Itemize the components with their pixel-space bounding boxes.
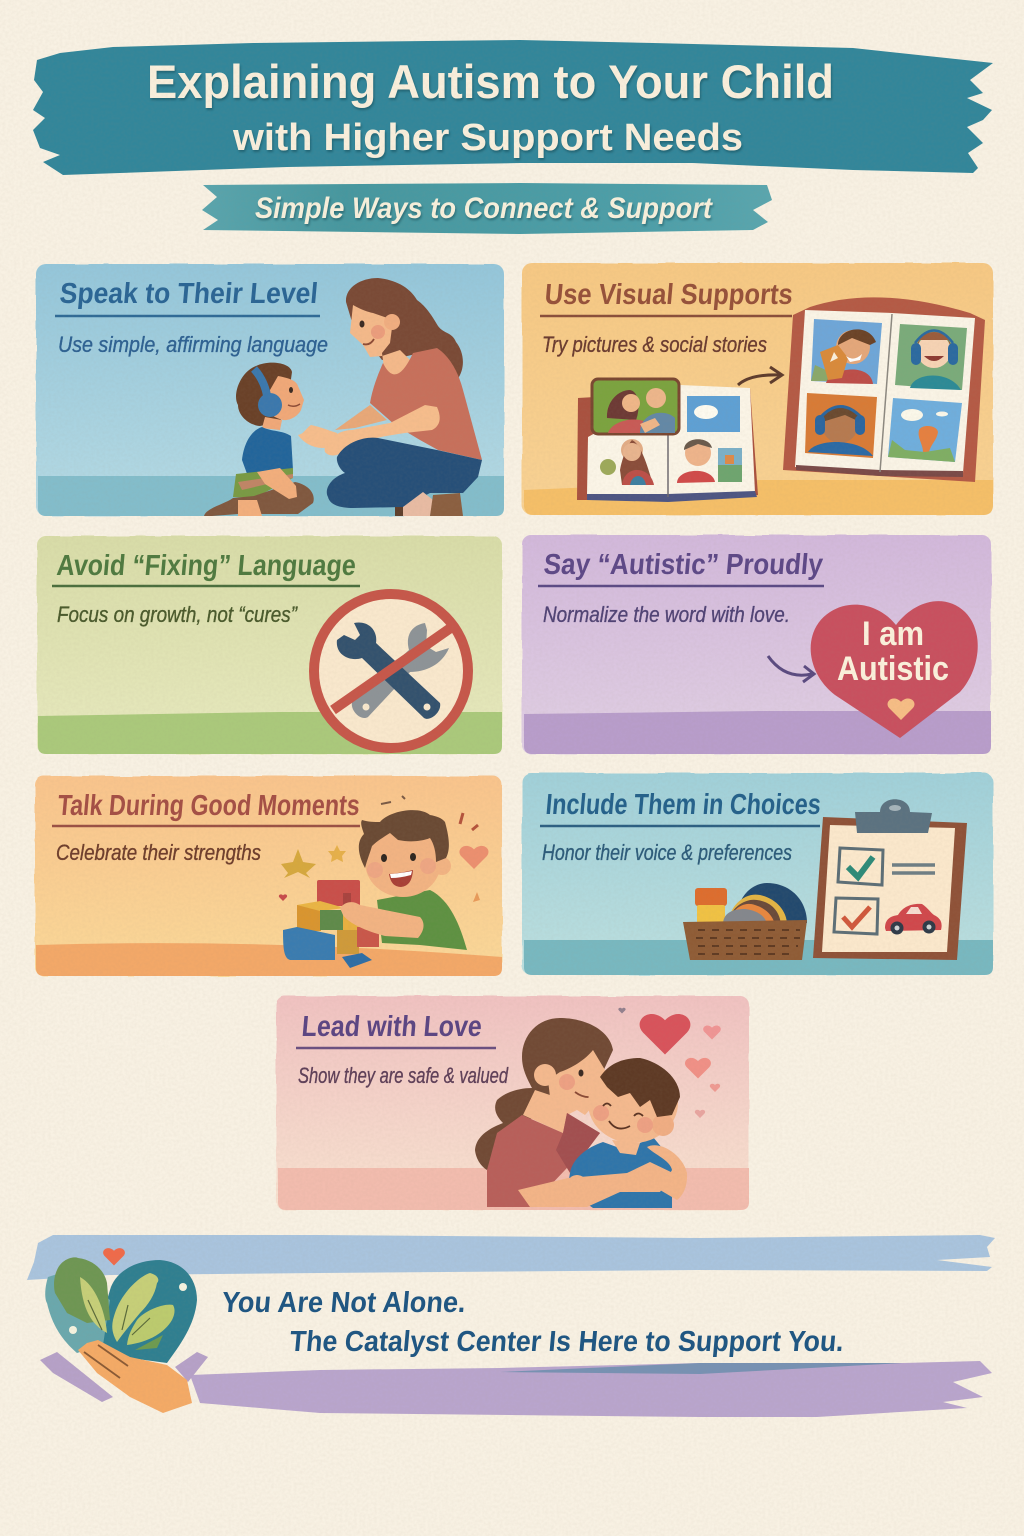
subheading: Honor their voice & preferences — [542, 840, 792, 865]
icon: I am Autistic heart: Autistic — [837, 650, 949, 688]
panel: speak to their level — [36, 264, 504, 516]
illustration: child with blocks — [279, 796, 489, 968]
heading: Speak to Their Level — [58, 278, 319, 310]
footer banner: The Catalyst Center Is Here to Support You. — [288, 1326, 845, 1358]
heading: Include Them in Choices — [544, 789, 822, 821]
illustration: toy basket — [683, 883, 807, 960]
illustration: hug — [475, 1008, 721, 1208]
panel: include them in choices — [522, 773, 993, 975]
illustration: clipboard checklist — [813, 799, 967, 960]
illustration: mother — [298, 278, 482, 516]
title banner: Explaining Autism to Your Child — [147, 55, 834, 108]
footer message: You Are Not Alone. — [220, 1287, 467, 1319]
subheading: Focus on growth, not “cures” — [57, 602, 298, 627]
icon: I am Autistic heart — [811, 601, 978, 738]
subheading: Try pictures & social stories — [542, 332, 767, 357]
heading: Talk During Good Moments — [56, 790, 361, 822]
panel: avoid fixing language — [37, 536, 502, 754]
icon: crossed-out tools — [314, 594, 468, 748]
illustration: child with headphones — [204, 363, 314, 516]
subheading: Use simple, affirming language — [58, 332, 328, 357]
illustration: large picture book — [783, 297, 985, 482]
illustration: small picture book — [577, 379, 758, 502]
subheading: Show they are safe & valued — [298, 1063, 509, 1088]
subheading: Normalize the word with love. — [543, 602, 790, 627]
title banner — [33, 40, 993, 175]
heading: Lead with Love — [300, 1011, 483, 1043]
panel: talk during good moments — [35, 776, 502, 976]
panel: lead with love — [276, 996, 749, 1210]
heading: Use Visual Supports — [543, 279, 794, 311]
icon: I am Autistic heart: I am — [862, 615, 924, 653]
arrow — [768, 656, 814, 682]
footer banner — [27, 1235, 995, 1417]
title banner: with Higher Support Needs — [232, 117, 743, 159]
heading: Avoid “Fixing” Language — [55, 550, 357, 582]
icon: hand holding heart with leaves — [40, 1248, 208, 1413]
arrow — [738, 367, 782, 385]
subheading: Celebrate their strengths — [56, 840, 261, 865]
subtitle banner — [202, 183, 772, 234]
subtitle banner: Simple Ways to Connect & Support — [255, 192, 714, 225]
panel: use visual supports — [522, 263, 993, 515]
heading: Say “Autistic” Proudly — [542, 549, 824, 581]
panel: say autistic proudly — [522, 535, 991, 754]
